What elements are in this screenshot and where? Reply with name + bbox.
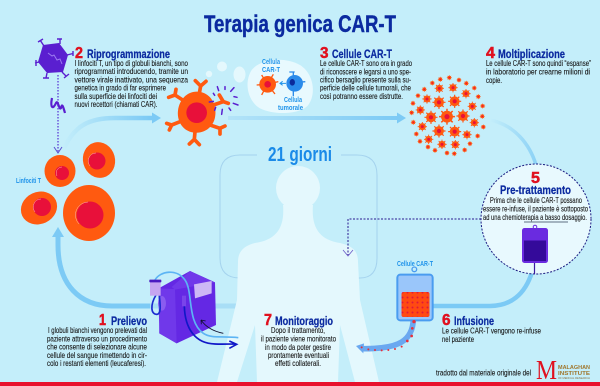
step 3 number and heading: 3 [320,45,329,62]
step 2 text: vettore virale inattivato, una sequenza [74,76,188,84]
step 7 text: Dopo il trattamento, [271,326,325,335]
step 6 number and heading: Infusione [454,314,494,328]
label: Cellule CAR-T: Cellule CAR-T [397,259,433,268]
step 4 number and heading: 4 [486,45,495,62]
step 5 number: 5 [531,170,540,187]
step 3 text: di riconoscere e legarsi a uno spe- [320,67,411,76]
icon: small CAR-T cell [257,74,278,95]
step 3 text: Le cellule CAR-T sono ora in grado [320,59,412,68]
step 3 number and heading [320,45,392,62]
21 giorni frame [220,155,377,278]
step 2 text: riprogrammati introducendo, tramite un [74,67,188,76]
CAR-T cell mass in bag [402,292,430,317]
icon: viral vector [35,39,73,78]
icon: genetic sequence [51,98,65,113]
logo: Malaghan Institute: MALAGHAN [558,365,590,371]
thought bubbles [206,62,246,82]
step 7 text: prontamente eventuali [268,351,329,360]
step 3 number and heading: Cellule CAR-T [332,47,392,61]
label: Linfociti T: Linfociti T [16,176,41,185]
step 2 text: sulla superficie dei linfociti dei [74,92,157,101]
step 7 number and heading: Monitoraggio [275,314,333,328]
step 2 text: I linfociti T, un tipo di globuli bianchi, sono [74,59,188,68]
bottom red bar [0,382,600,386]
arrow: CAR-T to multiplication [228,112,406,124]
logo: Malaghan Institute [536,355,590,385]
step 4 number and heading: Moltiplicazione [498,47,565,61]
step 3 text: perficie delle cellule tumorali, che [320,84,411,93]
label: Cellula tumorale: tumorale [278,103,303,112]
central CAR-T cell being reprogrammed [167,81,238,145]
step 1 text: I globuli bianchi vengono prelevati dal [48,326,147,335]
bubble: CAR-T cell meets tumour cell [248,60,313,113]
label: Cellula CAR-T: CAR-T [262,65,280,74]
step 2 number and heading: Riprogrammazione [87,47,170,61]
logo: Malaghan Institute: OF MEDICAL RESEARCH [558,376,590,380]
step 1 text: cellule del sangue rimettendo in cir- [47,351,147,360]
step 7 text: effetti collaterali. [275,359,321,368]
arrow: from apheresis to lymphocytes [52,227,240,306]
step 2 number and heading [75,45,170,62]
patient body silhouette [217,166,379,382]
icon: chemotherapy bag [522,222,568,274]
step 1 number and heading: 1 [99,312,106,329]
step 2 number and heading: 2 [75,45,83,62]
panel: step 5 pre-treatment [481,164,591,274]
logo: Malaghan Institute: M [536,355,557,385]
step 4 text: copie. [486,76,502,85]
step 1 number and heading [99,312,147,329]
label: Cellula CAR-T: Cellula [262,57,281,66]
step 1 text: che consente di selezionare alcune [47,343,147,352]
arrow: multiplication to pre-treatment [490,120,536,165]
logo: Malaghan Institute: INSTITUTE [558,371,590,377]
apheresis machine [149,271,238,348]
step 3 text: cifico bersaglio presente sulla su- [320,76,411,84]
dashed line: pre-treatment to patient [343,219,481,256]
step 1 number and heading: Prelievo [111,314,147,328]
label: Cellula tumorale: Cellula [284,95,303,104]
step 7 number and heading [264,312,333,329]
step 3 text: così potranno essere distrutte. [320,92,403,101]
step 4 number and heading [486,45,565,62]
step 6 number and heading [442,312,494,329]
icon: tumour cell [280,72,305,96]
step 2 text: genetica in grado di far esprimere [74,84,166,93]
step 6 text: Le cellule CAR-T vengono re-infuse [442,326,541,336]
step 5 heading: Pre-trattamento [500,183,571,197]
infusion bag with CAR-T cells [356,267,433,353]
dotted line: virus to lymphocytes [54,75,62,153]
step 7 text: in modo da poter gestire [265,343,331,352]
lymphocytes [15,138,119,241]
label: 21 giorni: 21 giorni [268,144,332,166]
step 1 text: colo i restanti elementi (leucaferesi). [47,359,146,368]
step 7 text: il paziente viene monitorato [261,334,336,344]
step 1 text: paziente attraverso un procedimento [47,334,147,344]
footer credit: tradotto dal materiale originale del [436,368,531,378]
step 6 number and heading: 6 [442,312,451,329]
step 2 text: nuovi recettori (chiamati CAR). [74,100,158,109]
arrow: pre-treatment to infusion [432,272,532,306]
step 7 number and heading: 7 [264,312,272,329]
arrow: lymphocytes to reprogramming [64,112,161,148]
step 6 text: nel paziente [442,335,474,344]
title: Terapia genica CAR-T [204,11,396,38]
multiplied CAR-T cell cluster [409,75,486,156]
